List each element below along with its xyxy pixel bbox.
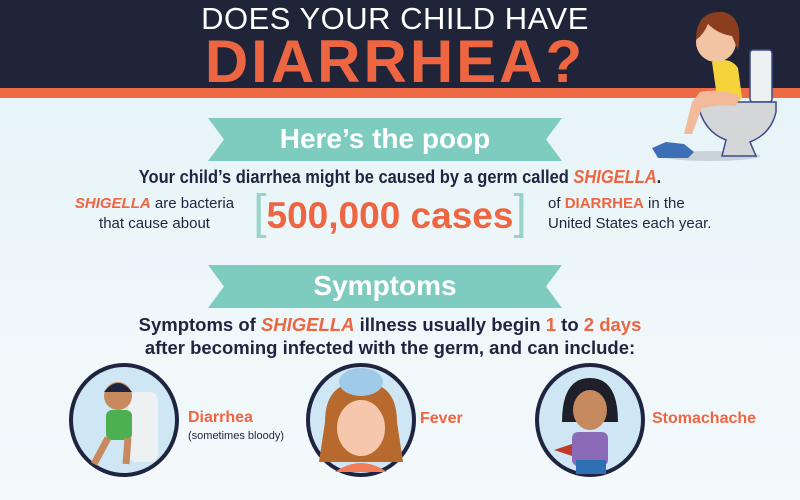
title (201, 1, 589, 95)
intro sentence: Your child’s diarrhea might be caused by a germ called SHIGELLA. (139, 166, 661, 187)
ribbon: Here's the poop (208, 118, 562, 161)
label: Stomachache: Stomachache (652, 410, 756, 427)
label: Diarrhea: Diarrhea (188, 409, 253, 426)
right fact text: of DIARRHEA in the (548, 195, 685, 212)
label: Diarrhea: (sometimes bloody) (188, 430, 284, 442)
header band (0, 0, 800, 88)
label: Fever: Fever (420, 410, 463, 427)
ribbon: Symptoms (208, 265, 562, 308)
symptoms intro: after becoming infected with the germ, and can include: (145, 337, 635, 358)
left fact text: that cause about (99, 215, 210, 232)
stat: 500,000 cases: [500,000 cases] (253, 186, 527, 239)
orange stripe (0, 88, 800, 98)
ribbon: Symptoms: Symptoms (313, 270, 457, 301)
title: DIARRHEA? (205, 28, 585, 95)
left fact text: SHIGELLA are bacteria (75, 195, 234, 212)
symptoms intro: Symptoms of SHIGELLA illness usually begin 1 to 2 days (139, 314, 641, 335)
label: Diarrhea (188, 409, 284, 442)
right fact text (548, 195, 711, 232)
icon: diarrhea child (69, 363, 179, 477)
icon: stomachache child (535, 363, 645, 477)
ribbon: Here's the poop: Here’s the poop (280, 123, 490, 154)
right fact text: United States each year. (548, 215, 711, 232)
title: DOES YOUR CHILD HAVE (201, 1, 589, 36)
symptoms intro (139, 314, 641, 358)
icon: fever child (306, 363, 416, 477)
illustration: boy on toilet (652, 12, 777, 161)
left fact text (75, 195, 234, 232)
